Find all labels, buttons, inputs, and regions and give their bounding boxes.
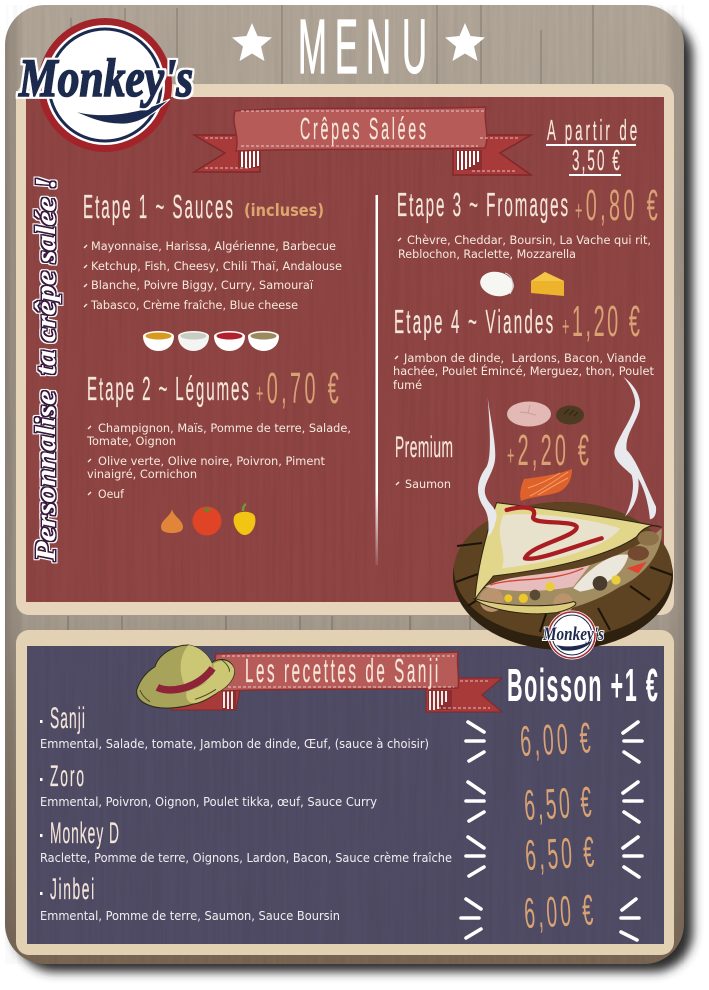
premium option: Premium (395, 430, 453, 463)
step 4 viandes: Jambon de dinde, Lardons, Bacon, Viande (403, 351, 646, 365)
price: 6,00 € (519, 715, 592, 766)
recipe: sanji (40, 701, 642, 766)
icon: right star (445, 23, 485, 61)
ribbon title: Crêpes Salées (300, 112, 426, 147)
step 4 viandes: +1,20 € (562, 297, 640, 346)
step 2 legumes (86, 364, 351, 536)
step 2 legumes: +0,70 € (256, 364, 339, 413)
icon: left star (232, 23, 272, 61)
ribbon: les recettes de sanji (172, 652, 502, 712)
plate (453, 502, 673, 650)
step 3 fromages (397, 181, 658, 299)
rays (466, 722, 642, 762)
recipe: monkey d: Raclette, Pomme de terre, Oignons, Lardon, Bacon, Sauce crème fraîche (40, 850, 452, 865)
step 2 legumes: Olive verte, Olive noire, Poivron, Piment (98, 454, 325, 468)
step 2 legumes: Oeuf (98, 487, 125, 501)
step 4 viandes: hachée, Poulet Émincé, Merguez, thon, Poulet (393, 363, 654, 378)
logo: monkey's: Monkey's (18, 48, 193, 108)
mini logo: Monkey's (542, 624, 604, 645)
step 2 legumes: Tomate, Oignon (86, 434, 176, 448)
step 1 sauces: Mayonnaise, Harissa, Algérienne, Barbecue (91, 239, 336, 253)
crepe (473, 503, 662, 614)
mini logo (542, 610, 604, 660)
step 1 sauces: (incluses) (244, 201, 324, 221)
recipe: zoro: Zoro (50, 759, 84, 792)
drink supplement: Boisson +1 € (507, 659, 658, 711)
icon: sauce bowls (143, 331, 279, 351)
logo: monkey's (18, 18, 193, 152)
recipe: zoro: Emmental, Poivron, Oignon, Poulet tikka, œuf, Sauce Curry (40, 794, 377, 809)
header: stars and MENU title (232, 3, 485, 90)
divider (376, 195, 378, 565)
ribbon: crepes salees (194, 107, 531, 175)
icon: straw hat (137, 645, 234, 708)
step 3 fromages: Etape 3 ~ Fromages (397, 188, 568, 224)
premium option: Saumon (405, 477, 451, 491)
panel fill (27, 646, 664, 944)
panel: recettes de sanji (16, 630, 674, 955)
recipe: jinbei: Emmental, Pomme de terre, Saumon, Sauce Boursin (40, 908, 340, 923)
step 3 fromages: Reblochon, Raclette, Mozzarella (398, 247, 576, 261)
rays (461, 899, 639, 940)
step 1 sauces: Ketchup, Fish, Cheesy, Chili Thaï, Andalouse (91, 259, 342, 273)
recipe: monkey d: Monkey D (50, 816, 119, 849)
step 1 sauces: Blanche, Poivre Biggy, Curry, Samouraï (91, 278, 314, 292)
recipe: sanji: Emmental, Salade, tomate, Jambon de dinde, Œuf, (sauce à choisir) (40, 736, 429, 751)
recipe: monkey d (40, 816, 642, 880)
price: 6,50 € (524, 829, 596, 880)
price: 6,50 € (523, 779, 593, 830)
step 2 legumes: Etape 2 ~ Légumes (87, 372, 249, 408)
step 4 viandes (393, 297, 654, 426)
icon: cheeses (478, 269, 564, 299)
step 3 fromages: Chèvre, Cheddar, Boursin, La Vache qui rit, (407, 233, 651, 247)
panel fill (26, 97, 664, 602)
recipe: zoro (40, 759, 642, 830)
rays (466, 837, 642, 877)
icon: vegetables (161, 504, 255, 536)
vertical slogan: Personnalise ta crêpe salée ! (31, 177, 62, 562)
rays (466, 782, 642, 822)
panel frame (16, 84, 674, 615)
illustration: crepe on wooden plate (453, 377, 673, 660)
step 3 fromages: +0,80 € (575, 181, 658, 230)
recipe: sanji: Sanji (50, 701, 85, 734)
step 2 legumes: vinaigré, Cornichon (87, 467, 197, 481)
ribbon title: Les recettes de Sanji (245, 654, 438, 690)
premium option (395, 426, 589, 501)
icon: salmon (520, 469, 572, 501)
starting price note: A partir de (547, 114, 637, 146)
step 2 legumes: Champignon, Maïs, Pomme de terre, Salade, (98, 421, 351, 435)
starting price note (546, 114, 637, 176)
recipe: jinbei: Jinbei (50, 872, 94, 905)
step 1 sauces: Etape 1 ~ Sauces (83, 190, 233, 226)
premium option: +2,20 € (507, 426, 589, 475)
panel frame (16, 630, 674, 955)
starting price note: 3,50 € (572, 144, 620, 176)
step 4 viandes: fumé (393, 378, 422, 392)
step 4 viandes: Etape 4 ~ Viandes (394, 305, 553, 341)
price: 6,00 € (523, 887, 595, 938)
step 1 sauces (83, 190, 342, 351)
icon: meats (507, 402, 584, 426)
panel: crepes salees (16, 84, 674, 615)
title: MENU (298, 3, 427, 90)
recipe: jinbei (40, 872, 639, 940)
step 1 sauces: Tabasco, Crème fraîche, Blue cheese (90, 298, 298, 312)
steam (478, 377, 656, 537)
